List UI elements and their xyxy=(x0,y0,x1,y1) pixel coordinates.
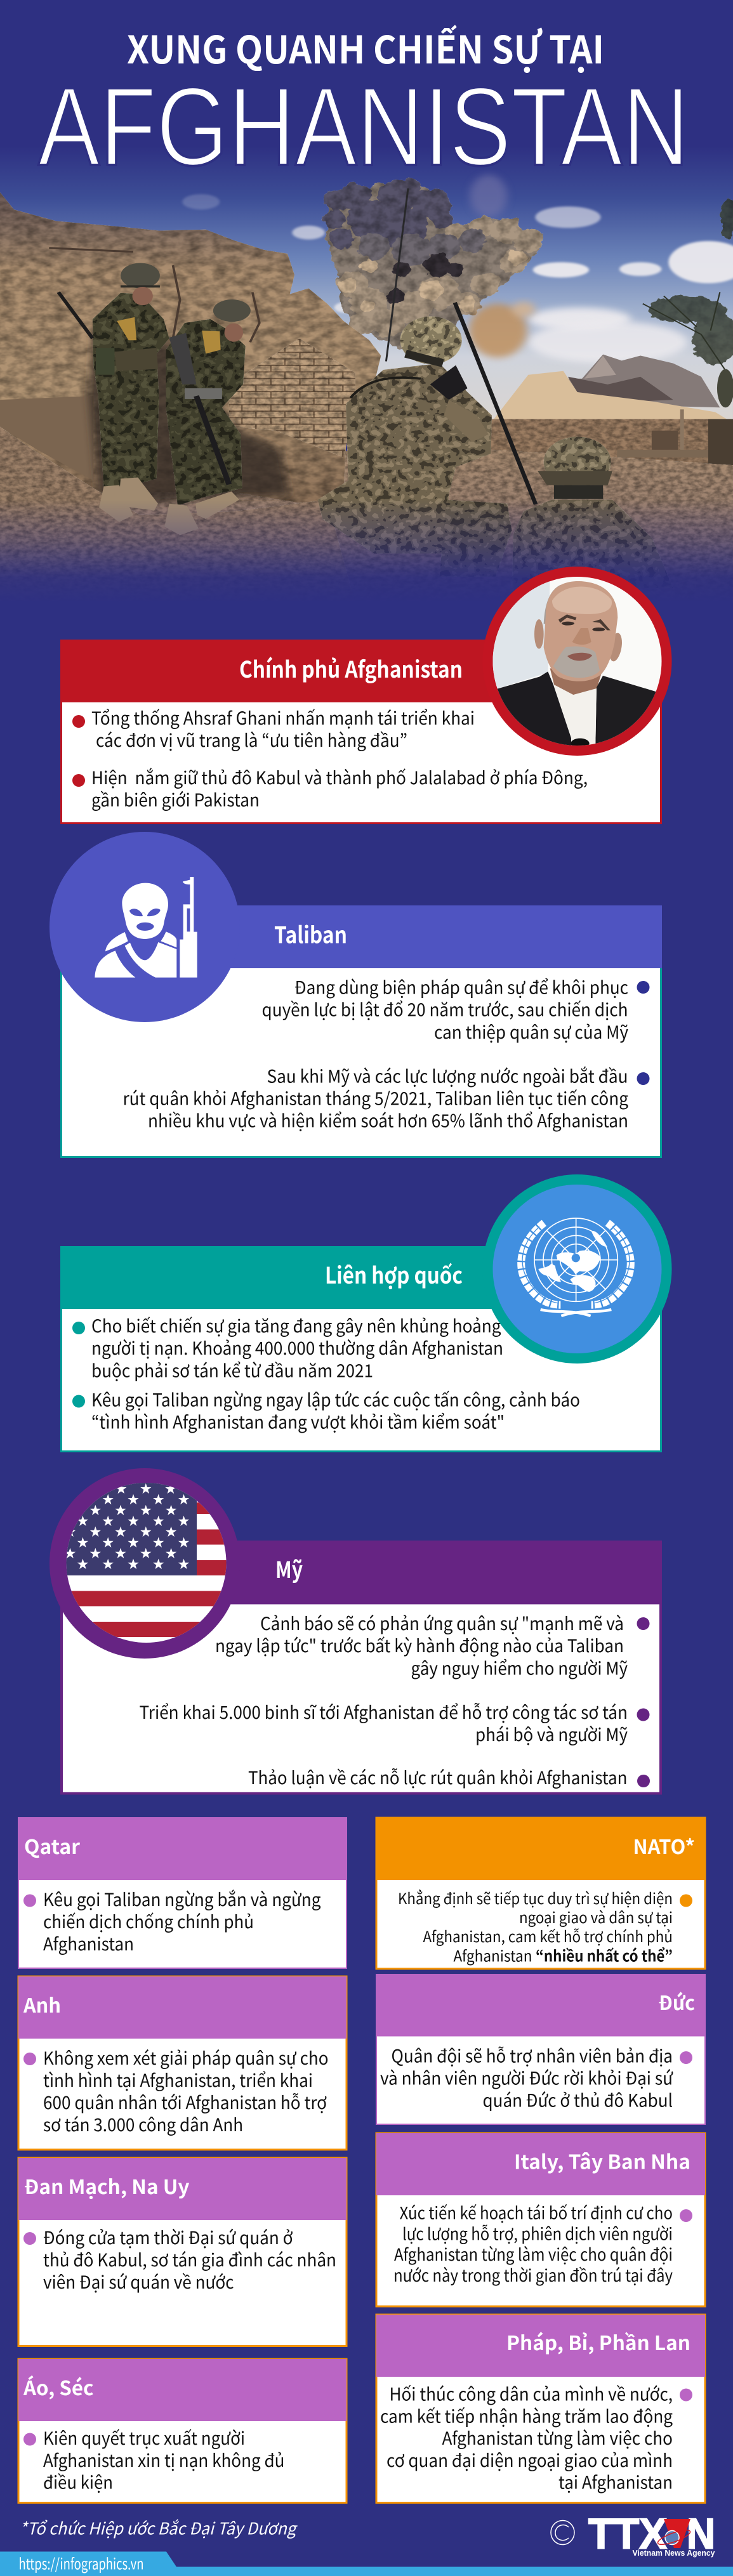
box: Anh: tình hình tại Afghanistan, triển khai xyxy=(43,2067,313,2093)
box: Áo, Séc: Kiên quyết trục xuất người xyxy=(43,2425,245,2450)
box: Pháp, Bỉ, Phần Lan: cơ quan đại diện ngoại giao của mình xyxy=(386,2447,673,2473)
beard xyxy=(553,647,600,678)
low wall xyxy=(477,419,733,465)
shadow behind soldiers xyxy=(89,327,290,504)
heading: Liên hợp quốc xyxy=(325,1258,463,1291)
box: Áo, Séc: Áo, Séc xyxy=(23,2372,94,2401)
box: Pháp, Bỉ, Phần Lan: Hối thúc công dân của mình về nước, xyxy=(390,2381,673,2406)
bullet 2: Hiện nắm giữ thủ đô Kabul và thành phố Jalalabad ở phía Đông, xyxy=(91,765,588,790)
box: Đan Mạch, Na Uy: thủ đô Kabul, sơ tán gia đình các nhân xyxy=(43,2247,336,2272)
box: Anh xyxy=(18,1976,347,2150)
ears xyxy=(534,619,544,649)
bullet 2 xyxy=(72,765,588,812)
bullet 2: “tình hình Afghanistan đang vượt khỏi tầm kiểm soát" xyxy=(91,1409,505,1434)
distant dust xyxy=(469,304,527,357)
bullet 1: buộc phải sơ tán kể từ đầu năm 2021 xyxy=(91,1358,373,1383)
panel header xyxy=(60,1246,662,1309)
heading: Taliban xyxy=(274,917,347,950)
box: Pháp, Bỉ, Phần Lan: cam kết tiếp nhận hàng trăm lao động xyxy=(380,2403,673,2429)
sand dune xyxy=(494,371,727,419)
heading: Mỹ xyxy=(275,1552,303,1585)
box: Đức xyxy=(376,1974,706,2124)
bullet 1 xyxy=(72,705,475,752)
box: Pháp, Bỉ, Phần Lan: Afghanistan từng làm việc cho xyxy=(442,2425,673,2450)
head xyxy=(544,581,617,681)
panel header xyxy=(60,640,662,702)
bullet 1: gây nguy hiểm cho người Mỹ xyxy=(411,1655,628,1680)
bullet 2: Kêu gọi Taliban ngừng ngay lập tức các cuộc tấn công, cảnh báo xyxy=(91,1387,580,1412)
box: Qatar: Qatar xyxy=(24,1831,80,1860)
box: Đức: Đức xyxy=(659,1987,695,2016)
box: Qatar: chiến dịch chống chính phủ xyxy=(43,1909,254,1934)
box: Anh: sơ tán 3.000 công dân Anh xyxy=(43,2112,243,2137)
bullet 2 xyxy=(140,1699,650,1747)
bullet 1 xyxy=(261,975,650,1044)
panel body xyxy=(61,906,661,1157)
panel: Chính phủ Afghanistan xyxy=(60,567,671,824)
bullet 2: nhiều khu vực và hiện kiểm soát hơn 65% lãnh thổ Afghanistan xyxy=(148,1108,628,1133)
box: Italy, Tây Ban Nha xyxy=(376,2133,705,2306)
soldiers' uniforms xyxy=(93,293,673,588)
box: Anh: Anh xyxy=(23,1990,61,2018)
sky xyxy=(0,161,733,419)
faint smoke plume xyxy=(470,175,507,217)
icon: US flag xyxy=(50,1468,240,1659)
TTXVN wordmark: Vietnam News Agency xyxy=(632,2549,715,2558)
wall shadows and cracks xyxy=(49,248,260,342)
wall bricks xyxy=(229,338,355,457)
box: Đan Mạch, Na Uy: viên Đại sứ quán về nước xyxy=(43,2269,234,2294)
bullet 1: người tị nạn. Khoảng 400.000 thường dân Afghanistan xyxy=(91,1335,503,1360)
TTXVN wordmark: TTX xyxy=(588,2510,667,2558)
title line 1: XUNG QUANH CHIẾN SỰ TẠI xyxy=(127,20,604,75)
panel: Liên hợp quốc xyxy=(60,1174,671,1452)
box: NATO: Afghanistan xyxy=(453,1944,532,1966)
box: Anh: Không xem xét giải pháp quân sự cho xyxy=(43,2045,329,2070)
fade into navy xyxy=(0,500,733,603)
portrait: Ashraf Ghani xyxy=(482,567,671,756)
TTXVN wordmark xyxy=(588,2510,715,2558)
footer bar with URL: https://infographics.vn xyxy=(19,2552,143,2573)
bullet 1: Tổng thống Ahsraf Ghani nhấn mạnh tái triển khai xyxy=(91,705,475,730)
box: Italy, Tây Ban Nha: Afghanistan từng làm việc cho quân đội xyxy=(394,2241,673,2266)
dark details on the large soldier xyxy=(350,378,421,398)
box: Pháp, Bỉ, Phần Lan xyxy=(376,2315,705,2502)
copyright mark xyxy=(551,2520,574,2544)
bullet 1: các đơn vị vũ trang là “ưu tiên hàng đầu” xyxy=(96,727,407,752)
panel body xyxy=(61,641,661,824)
box: Đan Mạch, Na Uy xyxy=(18,2158,347,2346)
box: Pháp, Bỉ, Phần Lan: tại Afghanistan xyxy=(558,2469,673,2495)
box: Italy, Tây Ban Nha: Xúc tiến kế hoạch tái bố trí định cư cho xyxy=(400,2199,673,2224)
box: NATO: Khẳng định sẽ tiếp tục duy trì sự hiện diện xyxy=(398,1886,673,1909)
well xyxy=(652,431,678,450)
box: Đức: quán Đức ở thủ đô Kabul xyxy=(482,2087,673,2113)
box: NATO: NATO* xyxy=(633,1831,695,1860)
smoke body xyxy=(325,181,540,350)
panel header xyxy=(60,905,662,968)
box: NATO: Afghanistan, cam kết hỗ trợ chính phủ xyxy=(423,1924,673,1947)
bullet 2 xyxy=(123,1063,650,1133)
bullet 2: Triển khai 5.000 binh sĩ tới Afghanistan để hỗ trợ công tác sơ tán xyxy=(140,1699,628,1725)
rubble slope xyxy=(0,426,347,572)
box: Đức: và nhân viên người Đức rời khỏi Đại sứ xyxy=(380,2065,673,2090)
bullet 2: phái bộ và người Mỹ xyxy=(475,1721,628,1747)
box: NATO: ngoại giao và dân sự tại xyxy=(519,1905,673,1928)
box: Đan Mạch, Na Uy: Đóng cửa tạm thời Đại sứ quán ở xyxy=(43,2224,293,2250)
bullet 1: Cho biết chiến sự gia tăng đang gây nên khủng hoảng xyxy=(91,1313,501,1338)
box: Qatar: Afghanistan xyxy=(43,1931,134,1956)
antennas xyxy=(386,188,408,362)
hair xyxy=(544,585,560,624)
box: Đan Mạch, Na Uy: Đan Mạch, Na Uy xyxy=(24,2171,190,2200)
clouds xyxy=(182,194,733,364)
mouth xyxy=(567,653,592,660)
bullet 2: Sau khi Mỹ và các lực lượng nước ngoài bắt đầu xyxy=(267,1063,628,1089)
icon: UN emblem xyxy=(482,1174,671,1364)
heading: Chính phủ Afghanistan xyxy=(239,652,463,685)
panel body xyxy=(62,1542,661,1793)
smooth plaster patch xyxy=(0,396,93,480)
box: Italy, Tây Ban Nha: nước này trong thời gian đồn trú tại đây xyxy=(393,2262,673,2287)
microphone xyxy=(571,739,590,749)
suit xyxy=(495,671,571,747)
title xyxy=(38,20,689,189)
shirt xyxy=(553,684,597,744)
box: Italy, Tây Ban Nha: lực lượng hỗ trợ, phiên dịch viên người xyxy=(402,2221,673,2245)
bullet 1: Đang dùng biện pháp quân sự để khôi phục xyxy=(294,975,628,1000)
bullet 1: quyền lực bị lật đổ 20 năm trước, sau chiến dịch xyxy=(261,996,628,1022)
box: Italy, Tây Ban Nha: Italy, Tây Ban Nha xyxy=(514,2146,690,2175)
bullet 2: rút quân khỏi Afghanistan tháng 5/2021, Taliban liên tục tiến công xyxy=(123,1085,628,1110)
box: Pháp, Bỉ, Phần Lan: Pháp, Bỉ, Phần Lan xyxy=(506,2327,690,2356)
copyright and TTXVN logo xyxy=(551,2510,715,2558)
nose xyxy=(572,628,591,645)
box: Qatar: Kêu gọi Taliban ngừng bắn và ngừng xyxy=(43,1886,321,1912)
panel: Taliban xyxy=(50,832,662,1157)
bullet 3: Thảo luận về các nỗ lực rút quân khỏi Afghanistan xyxy=(248,1764,627,1790)
bullet 1 xyxy=(215,1610,650,1680)
box: Áo, Séc: điều kiện xyxy=(43,2469,113,2495)
panel: Mỹ xyxy=(50,1468,662,1793)
ground xyxy=(100,449,733,584)
bullet 1: Cảnh báo sẽ có phản ứng quân sự "mạnh mẽ và xyxy=(260,1610,624,1636)
wreath xyxy=(521,1223,631,1305)
neck xyxy=(550,668,603,696)
bullet 1: ngay lập tức" trước bất kỳ hành động nào của Taliban xyxy=(215,1633,624,1658)
helmets, gear xyxy=(121,263,160,288)
TTXVN wordmark: N xyxy=(687,2510,715,2558)
panel header xyxy=(60,1541,662,1604)
hero photo: soldiers at a mud wall with an explosion behind xyxy=(0,146,733,603)
boots xyxy=(99,478,239,535)
bullet 1 xyxy=(72,1313,503,1383)
bullet 2: gần biên giới Pakistan xyxy=(91,787,260,812)
box: NATO: “nhiều nhất có thể” xyxy=(536,1944,673,1966)
bullet 1: can thiệp quân sự của Mỹ xyxy=(434,1019,628,1044)
distant mountains xyxy=(568,355,720,407)
tree at right xyxy=(647,200,733,365)
box: Anh: 600 quân nhân tới Afghanistan hỗ trợ xyxy=(43,2089,327,2115)
box: Đức: Quân đội sẽ hỗ trợ nhân viên bản địa xyxy=(391,2043,673,2068)
bullet 2 xyxy=(72,1387,580,1434)
icon: masked fighter with rifle xyxy=(50,832,240,1022)
box: NATO xyxy=(376,1817,706,1969)
mud wall xyxy=(0,192,381,508)
box: Áo, Séc: Afghanistan xin tị nạn không đủ xyxy=(43,2447,284,2473)
box: Áo, Séc xyxy=(18,2359,347,2502)
panel body xyxy=(61,1247,661,1452)
explosion smoke xyxy=(323,179,543,350)
footnote: *Tổ chức Hiệp ước Bắc Đại Tây Dương xyxy=(20,2516,298,2539)
footer bar with URL xyxy=(0,2552,733,2576)
brows xyxy=(558,614,611,630)
box: Qatar xyxy=(18,1817,347,1968)
